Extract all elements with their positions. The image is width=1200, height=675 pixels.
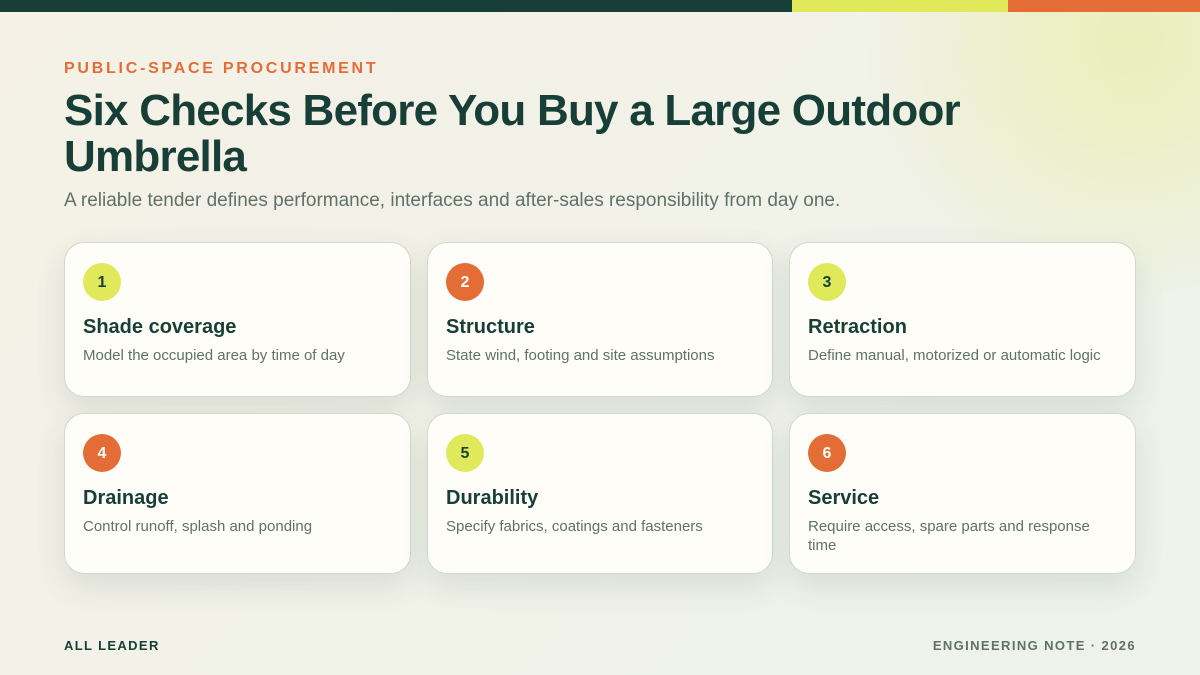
card 1: shade coverage — [64, 242, 411, 397]
card 1 text: Model the occupied area by time of day — [83, 347, 345, 364]
badge 2 — [446, 263, 484, 301]
subtitle: A reliable tender defines performance, interfaces and after-sales responsibility from day one. — [64, 190, 840, 211]
card 2 heading: Structure — [446, 316, 535, 338]
card 2 text: State wind, footing and site assumptions — [446, 347, 714, 364]
card 2: structure — [427, 242, 773, 397]
card 4: drainage — [64, 413, 411, 574]
footer brand: ALL LEADER — [64, 638, 160, 653]
badge 4: 4 — [98, 445, 106, 462]
card 4 heading: Drainage — [83, 487, 169, 509]
card 3: retraction — [789, 242, 1136, 397]
card 3 heading: Retraction — [808, 316, 907, 338]
top colour bar — [0, 0, 1200, 12]
card 4 text: Control runoff, splash and ponding — [83, 518, 312, 535]
card 1 heading: Shade coverage — [83, 316, 236, 338]
badge 2: 2 — [461, 274, 469, 291]
card 6: service — [789, 413, 1136, 574]
badge 6: 6 — [823, 445, 831, 462]
badge 3 — [808, 263, 846, 301]
badge 1 — [83, 263, 121, 301]
badge 5: 5 — [461, 445, 469, 462]
card 5 text: Specify fabrics, coatings and fasteners — [446, 518, 703, 535]
title: Six Checks Before You Buy a Large Outdoor Umbrella — [64, 86, 960, 181]
card 5 heading: Durability — [446, 487, 538, 509]
badge 4 — [83, 434, 121, 472]
badge 6 — [808, 434, 846, 472]
footer note: ENGINEERING NOTE · 2026 — [933, 638, 1136, 653]
card 6 text: Require access, spare parts and response time — [808, 518, 1090, 554]
badge 1: 1 — [98, 274, 106, 291]
card 6 heading: Service — [808, 487, 879, 509]
eyebrow label: PUBLIC-SPACE PROCUREMENT — [64, 60, 378, 77]
card 3 text: Define manual, motorized or automatic logic — [808, 347, 1101, 364]
badge 3: 3 — [823, 274, 831, 291]
card 5: durability — [427, 413, 773, 574]
badge 5 — [446, 434, 484, 472]
